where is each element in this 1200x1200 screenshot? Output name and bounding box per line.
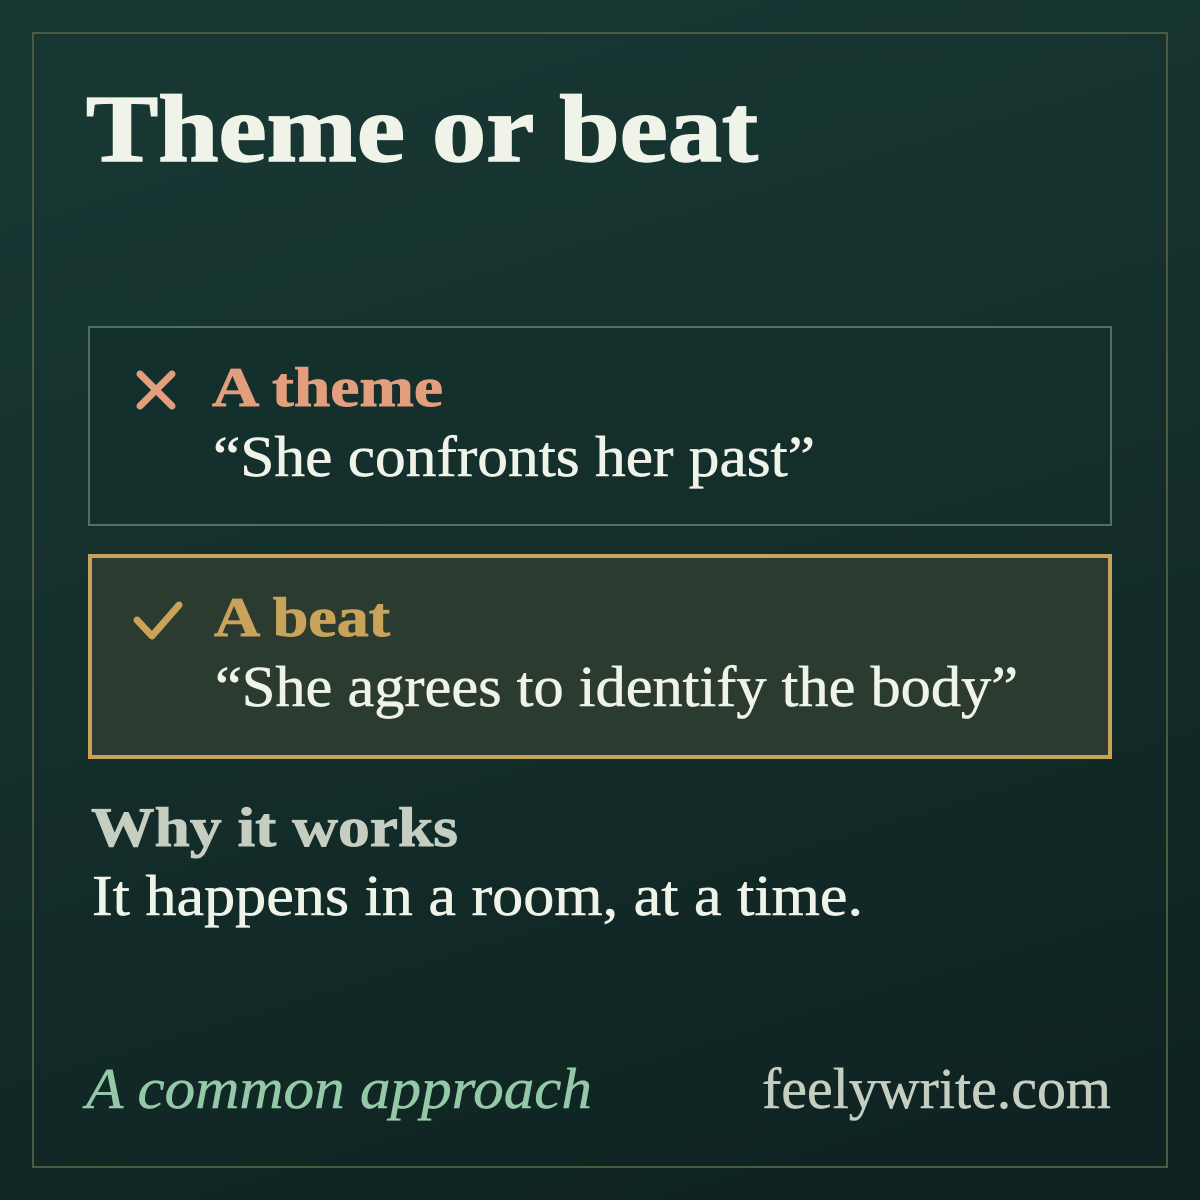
footer: website: feelywrite.com <box>762 1056 1111 1121</box>
quote: theme: “She confronts her past” <box>213 424 815 489</box>
heading: why it works: Why it works <box>91 797 458 859</box>
panel: a theme <box>89 327 1111 525</box>
panel: a beat <box>90 556 1110 757</box>
panel frame: theme <box>89 327 1111 525</box>
heading: a beat: A beat <box>214 587 390 649</box>
explanation: It happens in a room, at a time. <box>92 863 863 928</box>
heading: a theme: A theme <box>212 357 443 419</box>
icon: check <box>137 605 179 636</box>
icon: cross <box>140 374 172 406</box>
text block: why it works <box>91 797 863 928</box>
footer: tagline: A common approach <box>82 1056 592 1121</box>
panel frame: beat <box>90 556 1110 757</box>
quote: beat: “She agrees to identify the body” <box>215 654 1018 719</box>
title: Theme or beat <box>86 75 758 182</box>
